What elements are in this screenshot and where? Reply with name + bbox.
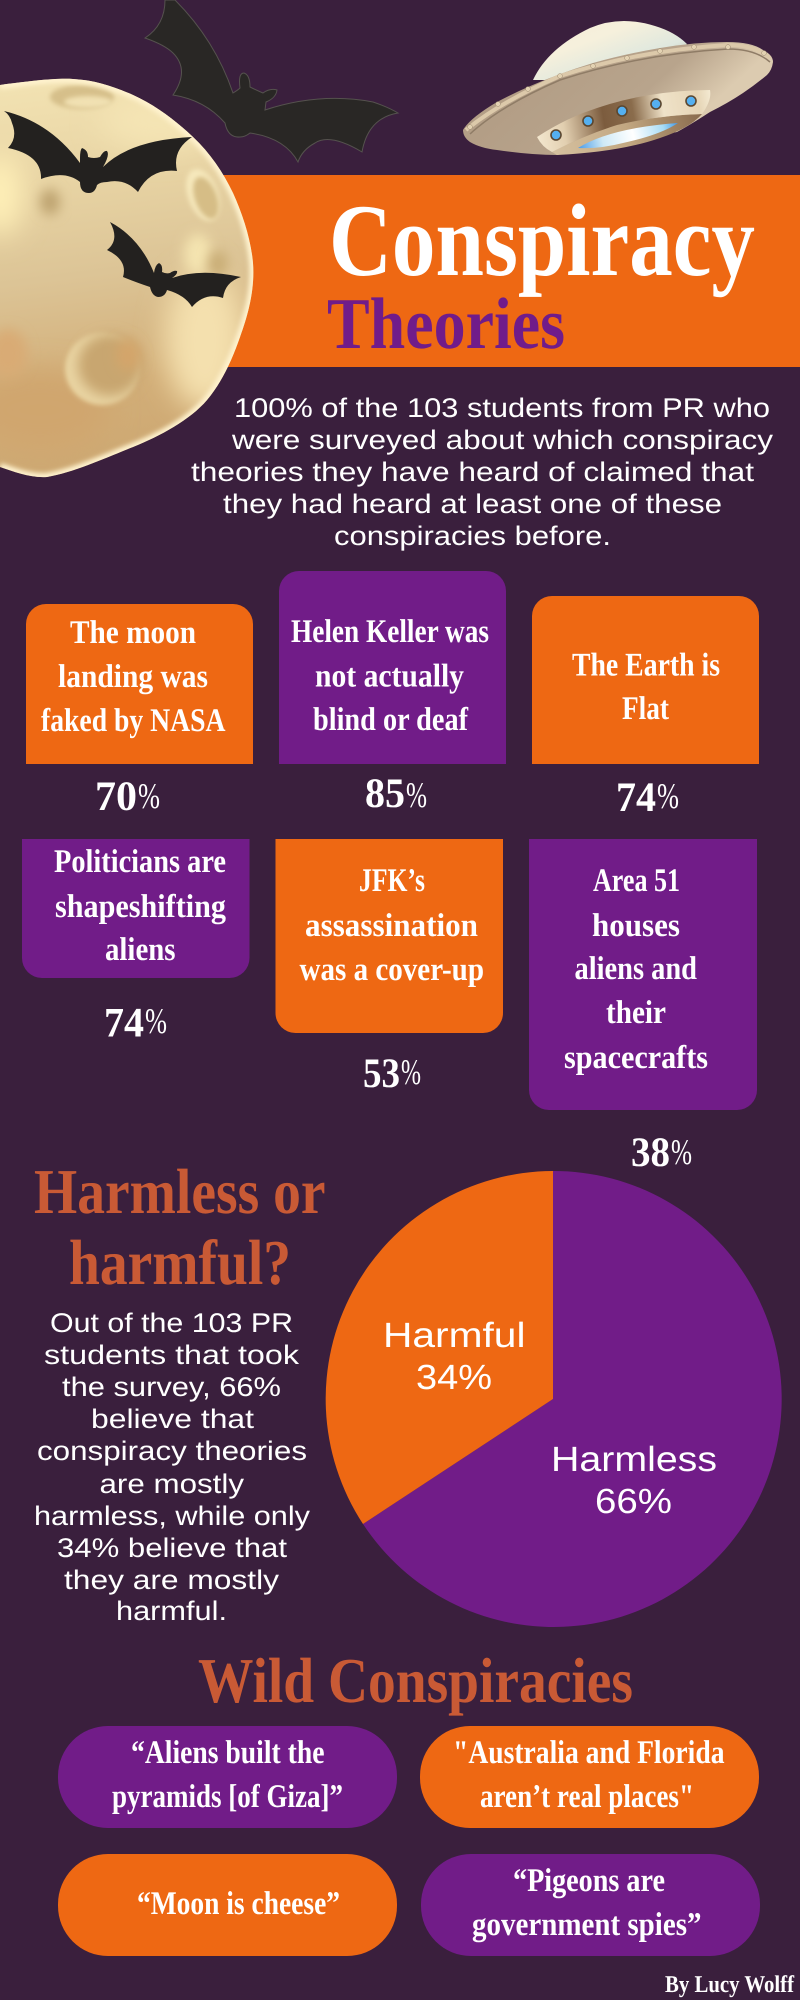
- stat: Helen Keller 85%: [365, 771, 427, 817]
- card: moon landing: The moon: [70, 615, 196, 651]
- label: harmful: [383, 1316, 526, 1397]
- pill: pigeons: “Pigeons are: [513, 1863, 665, 1899]
- illustration: bat on moon, lower: [107, 222, 241, 307]
- stat: flat Earth 74%: %: [657, 776, 679, 816]
- stat: Area 51 38%: %: [671, 1132, 692, 1172]
- pill: aliens pyramids: “Aliens built the: [131, 1735, 324, 1771]
- orange title banner: [200, 175, 800, 367]
- stat: Area 51 38%: [631, 1130, 692, 1176]
- illustration: bat on moon, upper: [4, 111, 192, 193]
- heading: Harmless or harmful?: Harmless or: [34, 1156, 326, 1227]
- intro text: [191, 393, 774, 551]
- title: Theories: [327, 283, 565, 364]
- survey text: conspiracy theories: [37, 1436, 307, 1466]
- card: moon landing: landing was: [58, 659, 208, 695]
- card: shapeshifting politicians: [22, 839, 250, 978]
- card: JFK: JFK’s: [359, 863, 425, 899]
- survey text: [34, 1308, 311, 1626]
- intro text: conspiracies before.: [334, 521, 611, 551]
- survey text: the survey, 66%: [62, 1372, 281, 1402]
- illustration: flying saucer: [463, 21, 773, 155]
- pill: pigeons: government spies”: [472, 1907, 702, 1943]
- card: flat Earth: Flat: [622, 691, 669, 727]
- survey text: Out of the 103 PR: [50, 1308, 293, 1338]
- stat: Helen Keller 85%: %: [406, 775, 427, 815]
- pill: Australia and Florida: "Australia and Florida: [453, 1735, 724, 1771]
- card: Area 51: spacecrafts: [564, 1040, 708, 1076]
- survey text: 34% believe that: [57, 1533, 288, 1563]
- heading: Wild Conspiracies: Wild Conspiracies: [198, 1645, 633, 1716]
- label: harmful: Harmful: [383, 1316, 526, 1355]
- card: shapeshifting politicians: Politicians are: [54, 844, 226, 880]
- card: Helen Keller: [279, 571, 506, 764]
- intro text: 100% of the 103 students from PR who: [234, 393, 770, 423]
- card: shapeshifting politicians: shapeshifting: [55, 889, 226, 925]
- stat: flat Earth 74%: 74: [616, 775, 656, 821]
- illustration: large bat: [145, 0, 398, 162]
- stat: politicians 74%: %: [145, 1001, 167, 1041]
- stat: moon landing 70%: %: [138, 776, 160, 816]
- survey text: students that took: [44, 1340, 300, 1370]
- pill: aliens pyramids: [58, 1726, 397, 1828]
- stat: moon landing 70%: 70: [95, 774, 137, 820]
- pill: pigeons: [421, 1854, 760, 1956]
- survey text: believe that: [91, 1404, 255, 1434]
- title: [327, 184, 755, 364]
- pill: moon is cheese: [58, 1854, 397, 1956]
- slice: harmful 34%: [326, 1171, 553, 1524]
- label: harmless: 66%: [595, 1482, 672, 1521]
- card: JFK: was a cover-up: [300, 952, 484, 988]
- stat: politicians 74%: 74: [104, 1000, 144, 1046]
- card: Helen Keller: not actually: [315, 658, 464, 694]
- stat: politicians 74%: [104, 1000, 167, 1046]
- label: harmful: 34%: [416, 1358, 492, 1397]
- card: Area 51: houses: [592, 908, 680, 944]
- intro text: were surveyed about which conspiracy: [231, 425, 774, 455]
- card: Area 51: Area 51: [593, 863, 680, 899]
- card: shapeshifting politicians: aliens: [105, 932, 176, 968]
- pill: Australia and Florida: aren’t real places": [480, 1779, 694, 1815]
- intro text: theories they have heard of claimed that: [191, 457, 755, 487]
- card: JFK: assassination: [305, 908, 478, 944]
- label: harmless: Harmless: [551, 1440, 717, 1479]
- heading: Harmless or harmful?: [34, 1156, 326, 1298]
- illustration: moon: [0, 79, 253, 477]
- card: Helen Keller: blind or deaf: [313, 702, 469, 738]
- heading: Harmless or harmful?: harmful?: [69, 1227, 291, 1298]
- survey text: harmful.: [116, 1596, 227, 1626]
- pill: Australia and Florida: [420, 1726, 759, 1828]
- card: flat Earth: [532, 596, 759, 764]
- pill: aliens pyramids: pyramids [of Giza]”: [112, 1779, 343, 1815]
- card: Area 51: [529, 839, 757, 1110]
- stat: moon landing 70%: [95, 774, 160, 820]
- stat: Area 51 38%: 38: [631, 1130, 670, 1176]
- card: moon landing: faked by NASA: [41, 703, 226, 739]
- survey text: they are mostly: [64, 1565, 280, 1595]
- card: flat Earth: The Earth is: [572, 648, 720, 684]
- stat: flat Earth 74%: [616, 775, 679, 821]
- intro text: they had heard at least one of these: [223, 489, 722, 519]
- survey text: are mostly: [100, 1469, 245, 1499]
- survey text: harmless, while only: [34, 1501, 311, 1531]
- card: Area 51: their: [606, 995, 666, 1031]
- card: moon landing: [26, 604, 253, 764]
- slice: harmless 66%: [363, 1171, 782, 1627]
- card: JFK: [276, 839, 503, 1033]
- label: harmless: [551, 1440, 717, 1521]
- stat: JFK 53%: 53: [363, 1051, 400, 1097]
- pie chart: [326, 1171, 782, 1627]
- card: Area 51: aliens and: [574, 951, 697, 987]
- pill: moon is cheese: “Moon is cheese”: [137, 1886, 340, 1922]
- stat: JFK 53%: %: [401, 1052, 421, 1092]
- card: Helen Keller: Helen Keller was: [291, 614, 489, 650]
- stat: Helen Keller 85%: 85: [365, 771, 405, 817]
